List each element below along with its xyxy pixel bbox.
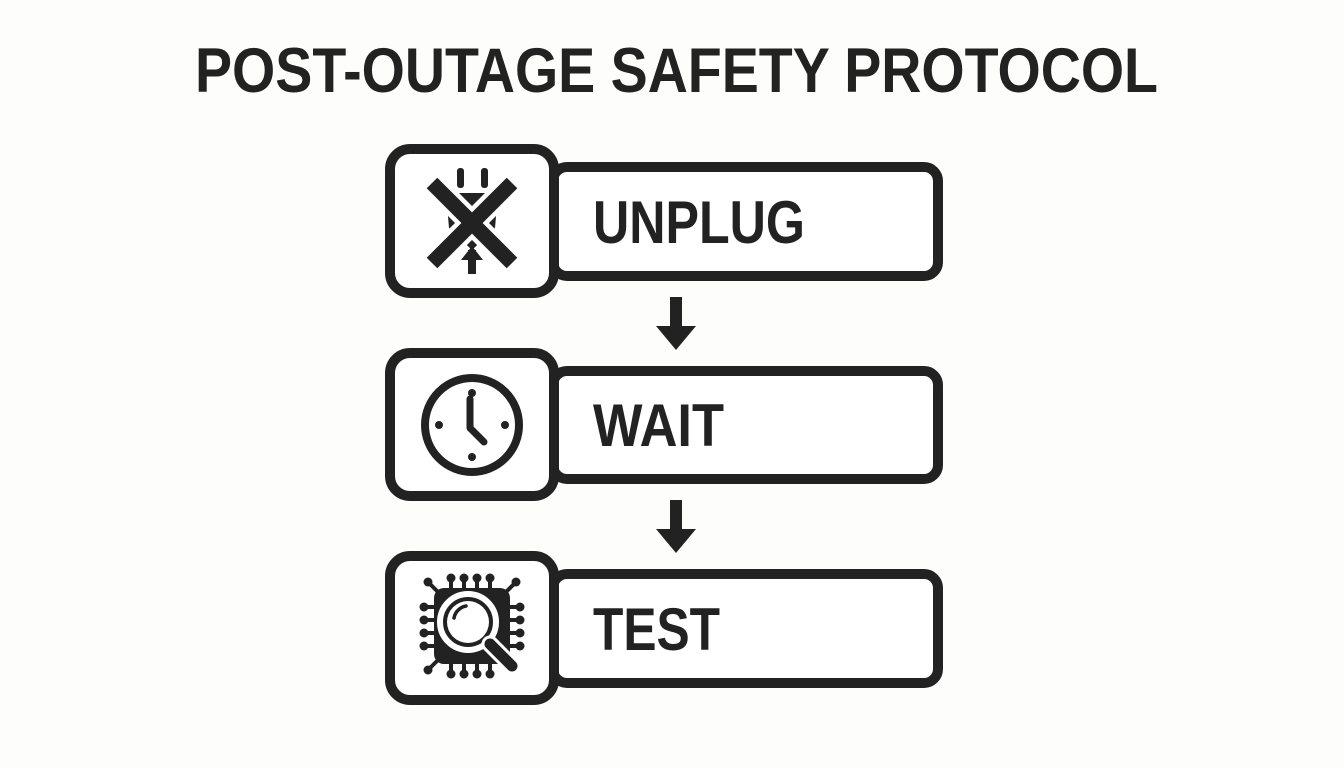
label: wait: WAIT — [593, 392, 724, 459]
icon box: unplug — [390, 149, 554, 293]
icon: chip with magnifier — [420, 574, 524, 678]
label: test: TEST — [593, 596, 720, 663]
arrow 2 — [656, 500, 696, 553]
icon: clock — [425, 378, 519, 472]
icon box: wait — [390, 353, 554, 496]
label: unplug: UNPLUG — [593, 189, 805, 256]
step 2: wait — [390, 353, 938, 496]
step 3: test — [390, 556, 938, 700]
label bar: unplug — [553, 167, 938, 276]
icon: unplug crossed — [432, 168, 512, 274]
arrow 1 — [656, 297, 696, 350]
title: POST-OUTAGE SAFETY PROTOCOL — [195, 36, 1158, 106]
step 1: unplug — [390, 149, 938, 293]
label bar: test — [553, 574, 938, 683]
icon box: test — [390, 556, 554, 700]
label bar: wait — [553, 371, 938, 479]
